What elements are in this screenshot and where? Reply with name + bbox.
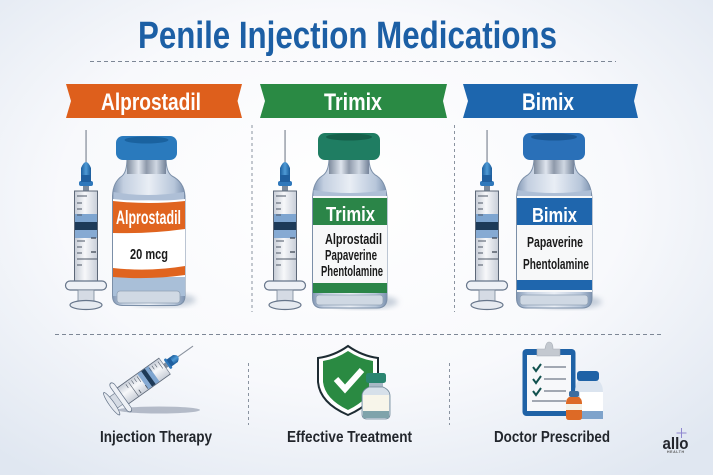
icon: Bimix vial <box>516 133 602 309</box>
icon: Bimix vial: Bimix <box>532 205 577 227</box>
icon: Alprostadil vial <box>112 136 196 307</box>
icon: syringe <box>466 130 508 310</box>
icon: clipboard and bottles <box>522 342 603 420</box>
panel: Bimix <box>463 84 638 310</box>
icon: Trimix vial: Alprostadil <box>325 231 382 248</box>
icon: Trimix vial: Phentolamine <box>321 263 383 280</box>
banner: Bimix <box>463 84 638 118</box>
icon: Trimix vial: Papaverine <box>325 247 377 264</box>
label: Injection Therapy <box>100 429 212 446</box>
logo: allo health: allo <box>662 435 688 453</box>
panel: Injection Therapy <box>100 332 212 446</box>
icon: Bimix vial: Phentolamine <box>523 256 589 273</box>
title: Penile Injection Medications <box>138 15 557 57</box>
banner: Alprostadil: Alprostadil <box>101 89 201 116</box>
icon: Bimix vial: Papaverine <box>527 234 583 251</box>
icon: angled syringe <box>100 332 203 419</box>
banner: Trimix: Trimix <box>324 89 383 116</box>
icon: Alprostadil vial: Alprostadil <box>116 208 181 229</box>
icon: shield with vial <box>318 346 390 419</box>
icon: Alprostadil vial: 20 mcg <box>130 246 168 263</box>
panel: Effective Treatment <box>287 346 413 446</box>
banner: Alprostadil <box>66 84 242 118</box>
label: Effective Treatment <box>287 429 413 446</box>
label: Doctor Prescribed <box>494 429 610 446</box>
icon: Trimix vial <box>312 133 398 309</box>
icon: syringe <box>264 130 306 310</box>
panel: Alprostadil <box>66 84 242 310</box>
panel: Trimix <box>260 84 447 310</box>
logo: allo health <box>662 428 688 454</box>
banner: Trimix <box>260 84 447 118</box>
icon: Trimix vial: Trimix <box>326 204 375 226</box>
icon: syringe <box>66 130 106 310</box>
logo: allo health: HEALTH <box>667 450 684 454</box>
banner: Bimix: Bimix <box>522 89 575 116</box>
panel: Doctor Prescribed <box>494 342 610 446</box>
